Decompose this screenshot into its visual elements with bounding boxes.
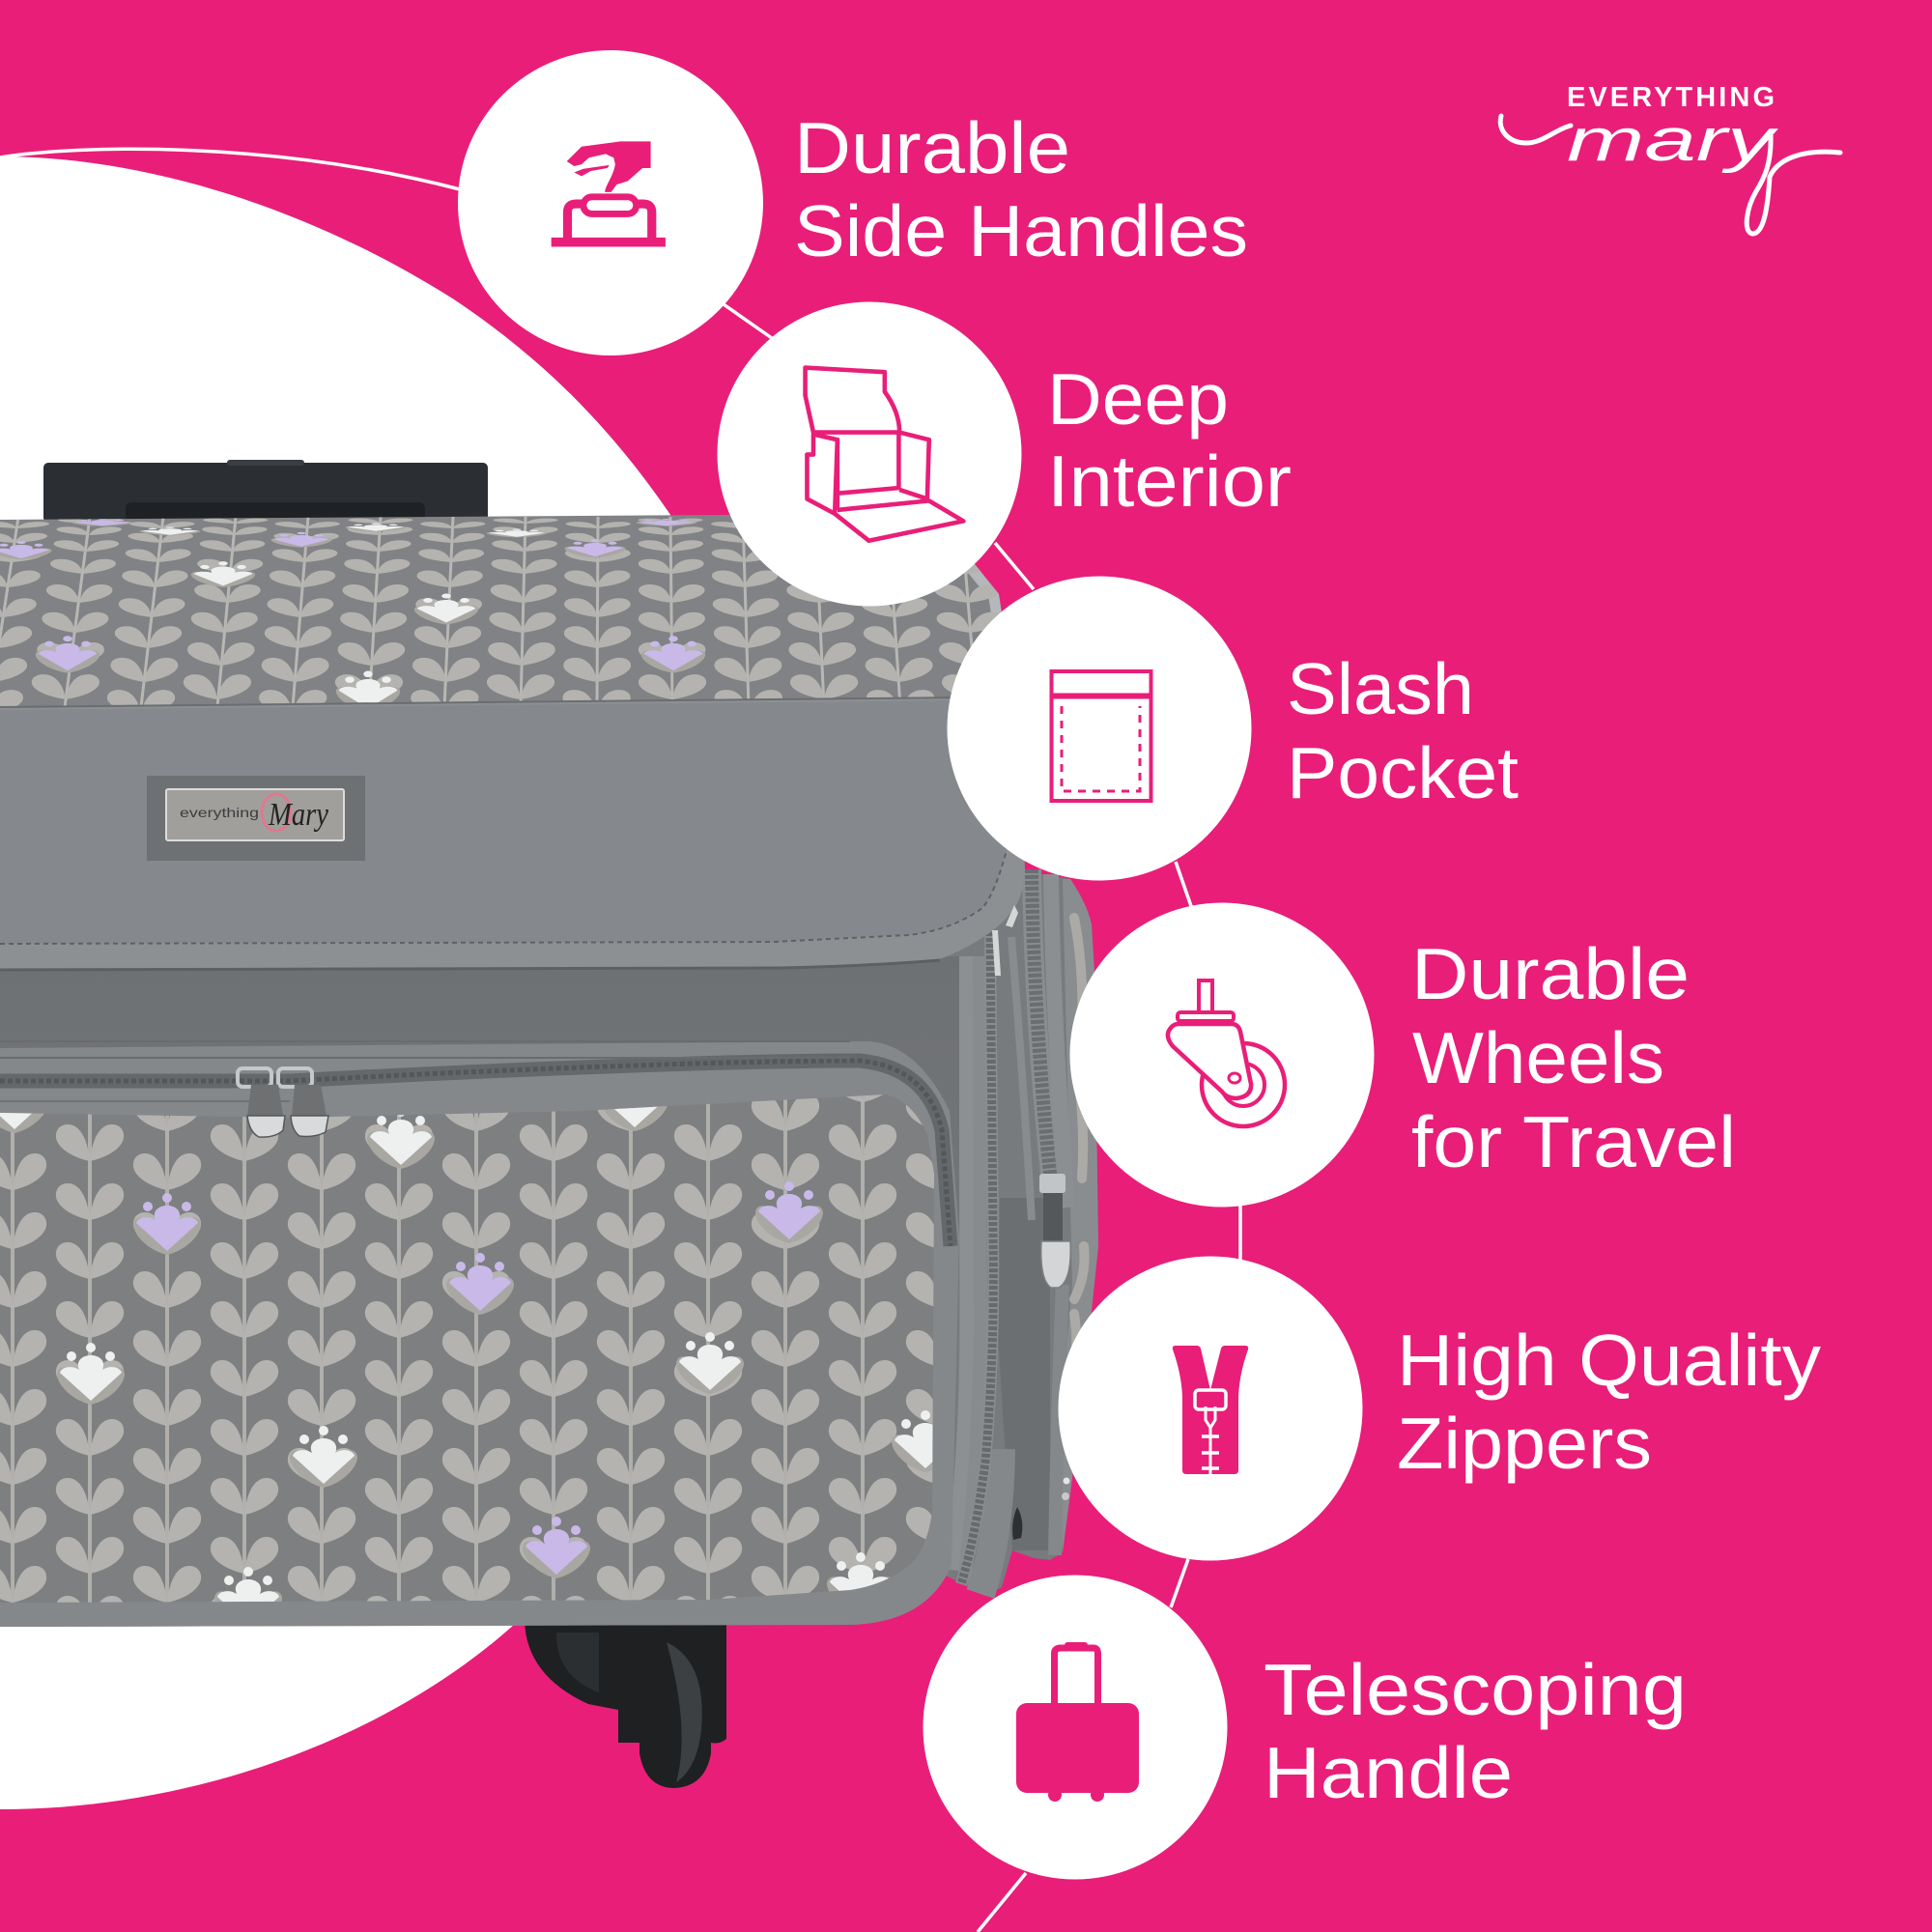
- icon: open box: [806, 368, 963, 541]
- badge script name: Mary: [268, 797, 329, 833]
- connecting lines between feature circles: [0, 149, 1240, 1932]
- flower motifs: [0, 519, 705, 711]
- label: telescoping handle: Telescoping: [1264, 1649, 1687, 1730]
- label: telescoping handle: Handle: [1264, 1732, 1513, 1813]
- label: telescoping handle: [1264, 1649, 1687, 1813]
- icon: zipper: [1173, 1346, 1248, 1474]
- icon: hand gripping handle: [552, 141, 666, 246]
- label: deep interior: Interior: [1047, 440, 1292, 522]
- label: durable side handles: [794, 107, 1248, 271]
- label: deep interior: [1047, 358, 1292, 522]
- label: durable wheels for travel: [1411, 933, 1736, 1182]
- caster wheels: [525, 1621, 726, 1788]
- badge wordmark: everything: [180, 805, 259, 820]
- label: slash pocket: Pocket: [1287, 732, 1519, 813]
- logo: everything mary: EVERYTHING: [1567, 82, 1775, 113]
- label: durable wheels for travel: Wheels: [1412, 1017, 1664, 1098]
- label: deep interior: Deep: [1047, 358, 1229, 440]
- feature circle 4: durable wheels: [1070, 902, 1374, 1208]
- icon: suitcase: [1016, 1642, 1139, 1802]
- feature circle 2: deep interior: [717, 301, 1022, 607]
- label: slash pocket: Slash: [1287, 648, 1474, 729]
- label: durable side handles: Durable: [794, 107, 1070, 188]
- flower motifs: [0, 1069, 959, 1629]
- feature circle 3: slash pocket: [947, 576, 1252, 881]
- label: high quality zippers: [1397, 1320, 1822, 1484]
- label: high quality zippers: Zippers: [1397, 1403, 1652, 1484]
- silver zipper pulls on the side: [992, 905, 1018, 976]
- logo: everything mary: mary: [1567, 107, 1779, 174]
- feature circle 5: high quality zippers: [1059, 1256, 1362, 1561]
- label: durable side handles: Side Handles: [794, 190, 1248, 271]
- icon: pocket: [1051, 671, 1151, 801]
- front pocket rim with zipper: [0, 1041, 959, 1627]
- front lower body: [0, 956, 959, 1627]
- side gusset of case: [908, 869, 1098, 1596]
- label: slash pocket: [1287, 648, 1519, 813]
- side zipper pull: [1039, 1174, 1070, 1288]
- feature circle 6: telescoping handle: [923, 1575, 1227, 1880]
- label: durable wheels for travel: Durable: [1411, 933, 1690, 1014]
- telescoping handle grip: [43, 460, 488, 523]
- front pocket zipper sliders: [238, 1068, 328, 1137]
- label: high quality zippers: High Quality: [1397, 1320, 1822, 1401]
- top lid floral print: [0, 512, 1014, 715]
- label: durable wheels for travel: for Travel: [1411, 1101, 1736, 1182]
- rolling case photo: [0, 460, 1098, 1788]
- feature circle 1: durable side handles: [458, 50, 763, 355]
- metal brand badge: [147, 776, 365, 861]
- front flap: [0, 697, 1025, 970]
- icon: caster wheel: [1168, 980, 1285, 1126]
- leaf rows: [0, 519, 1009, 715]
- front pocket floral print: [0, 1094, 934, 1603]
- white background shape: [0, 156, 869, 1809]
- logo: everything mary: [1500, 82, 1840, 234]
- stems: [0, 517, 977, 707]
